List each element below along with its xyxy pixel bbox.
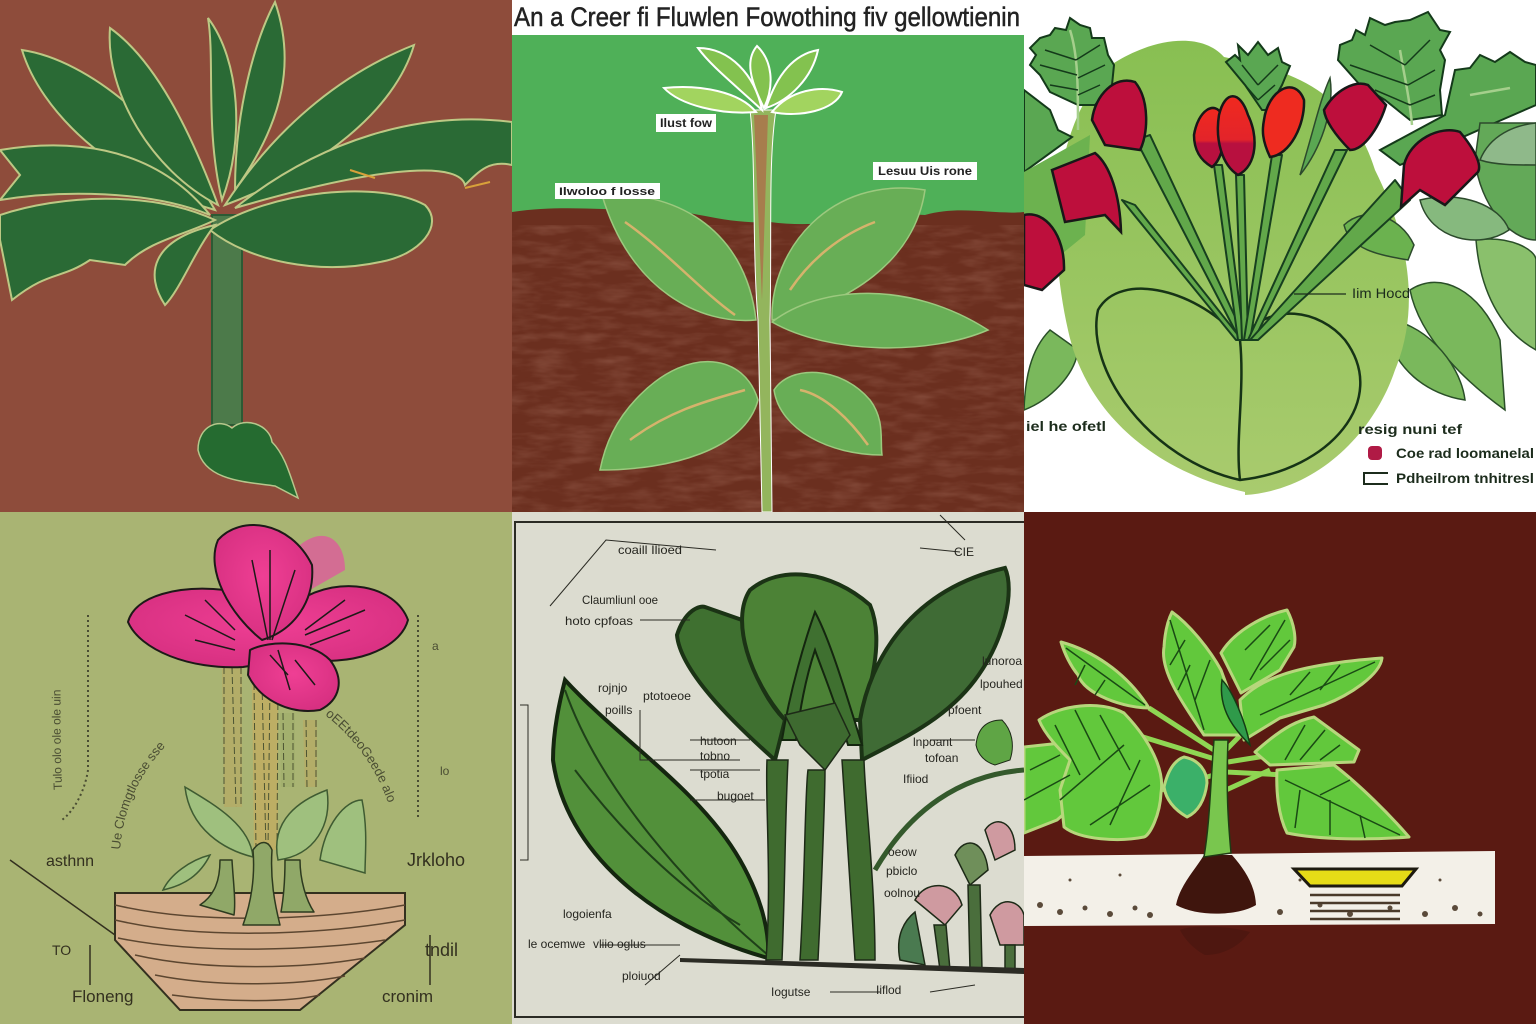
labels: lnpoant (913, 735, 953, 749)
label: Jrkloho (407, 850, 465, 870)
labels: logoienfa (563, 907, 612, 921)
large leaves (600, 188, 988, 470)
labels: CIE (954, 545, 974, 559)
labels: tobno (700, 749, 730, 763)
pebbles (1037, 874, 1482, 918)
labels: asthnn (46, 853, 94, 870)
soil scatter (1180, 926, 1250, 955)
legend: resig nuni tef (1358, 421, 1462, 437)
right branch (875, 770, 1024, 870)
panel: green heart with red flowers (1024, 0, 1536, 512)
curved annotation right: oEEtdeoGeede alo (326, 711, 394, 802)
label: TO (52, 942, 71, 958)
panel: plant growing in soil with labels (512, 0, 1024, 512)
curved annotation left: Ue Clomgtlosse sse (111, 743, 164, 848)
panel: green plant on maroon (1024, 512, 1536, 1024)
labels: oolnou (884, 886, 920, 900)
panel: vintage botanical plate (512, 512, 1035, 1024)
leaf midribs (1070, 30, 1510, 130)
labels: Iogutse (771, 985, 811, 999)
legend: Coe rad loomanelal (1396, 445, 1534, 461)
label: tndil (425, 940, 458, 960)
label: right (873, 162, 977, 180)
leaf veins (625, 222, 875, 445)
annotation lines (10, 860, 430, 985)
labels (528, 543, 1023, 999)
bulb (198, 423, 298, 498)
flower stems (1122, 135, 1410, 340)
leaf veins (1024, 620, 1400, 838)
label: top (656, 114, 716, 132)
panel: pink flower on olive (0, 512, 512, 1024)
white soil band (1024, 851, 1495, 926)
central dark leaf (1221, 680, 1250, 745)
soil (512, 208, 1024, 512)
dish stripes (1310, 895, 1400, 919)
labels: Ifiiod (903, 772, 928, 786)
labels: bugoet (717, 789, 754, 803)
label: right centre (1294, 288, 1410, 298)
labels: Claumliunl ooe (582, 593, 658, 607)
labels: lpouhed (980, 677, 1023, 691)
labels: Iiflod (876, 983, 901, 997)
leaf midrib (565, 690, 768, 955)
flower (128, 525, 408, 711)
ruler annotations: Tulo olo ole ole uin (52, 690, 62, 790)
plate frame (515, 522, 1035, 1017)
plant stem (212, 215, 242, 425)
labels: pfoent (948, 703, 982, 717)
heart lobes (1096, 289, 1360, 480)
leaf side veins (1040, 40, 1435, 105)
labels: tofoan (925, 751, 958, 765)
heart body (1056, 41, 1409, 495)
big foreground leaf (553, 680, 768, 958)
ruler annotations: a (432, 639, 439, 653)
label: Floneng (72, 987, 133, 1006)
soil texture (512, 225, 1024, 512)
labels: tpotia (700, 767, 730, 781)
label: left: Ilwoloo f losse (559, 186, 655, 198)
labels: poills (605, 703, 632, 717)
side rulers (62, 615, 418, 820)
ruler annotations: lo (440, 764, 450, 778)
label: left (555, 183, 660, 199)
labels: lunoroa (982, 654, 1022, 668)
small bud (976, 720, 1012, 765)
soil strata (115, 905, 405, 1001)
leaves (1024, 610, 1409, 840)
flowers (899, 822, 1024, 970)
leader lines (520, 515, 975, 992)
ground (680, 958, 1024, 974)
labels: oeow (888, 845, 917, 859)
labels: ploiuod (622, 969, 661, 983)
stems (766, 760, 875, 960)
labels: vliio oglus (593, 937, 646, 951)
soil wedge (115, 893, 405, 1010)
label: cronim (382, 987, 433, 1006)
labels: hutoon (700, 734, 737, 748)
labels: pbiclo (886, 864, 918, 878)
right pale leaves (1300, 78, 1536, 260)
label: right: Lesuu Uis rone (878, 164, 972, 178)
yellow dish (1294, 869, 1416, 886)
panel: palm-like plant on brown (0, 0, 512, 512)
plant base and roots (200, 842, 314, 925)
heading strip (512, 0, 1024, 35)
braided stems (222, 667, 317, 850)
labels: le ocemwe (528, 937, 586, 951)
legend (1358, 421, 1534, 486)
leaf petioles (1120, 700, 1290, 790)
labels: coaill Ilioed (618, 543, 682, 557)
top leaves (664, 46, 842, 114)
legend: Pdheilrom tnhitresl (1396, 470, 1534, 486)
label: left: iel he ofetl (1026, 418, 1106, 434)
soil mound (1176, 855, 1256, 914)
serrated top leaves (1024, 12, 1536, 280)
heading: An a Creer fi Fluwlen Fowothing fiv gellowtienin (514, 2, 1020, 32)
ruler annotations (52, 644, 449, 790)
labels: rojnjo (598, 681, 628, 695)
central arch (782, 612, 862, 745)
petal lines (185, 550, 365, 690)
red flowers (1024, 81, 1479, 290)
labels: hoto cpfoas (565, 614, 633, 628)
stem (1204, 740, 1231, 857)
leaf cluster (0, 2, 512, 305)
small leaf (785, 703, 850, 770)
label: top: Ilust fow (660, 116, 713, 130)
large leaves (677, 568, 1009, 760)
labels: ptotoeoe (643, 689, 691, 703)
lower leaves (163, 787, 366, 890)
lower outer leaves (1024, 239, 1536, 410)
label: right centre: Iim Hocd (1352, 285, 1410, 301)
central stem (750, 110, 776, 512)
